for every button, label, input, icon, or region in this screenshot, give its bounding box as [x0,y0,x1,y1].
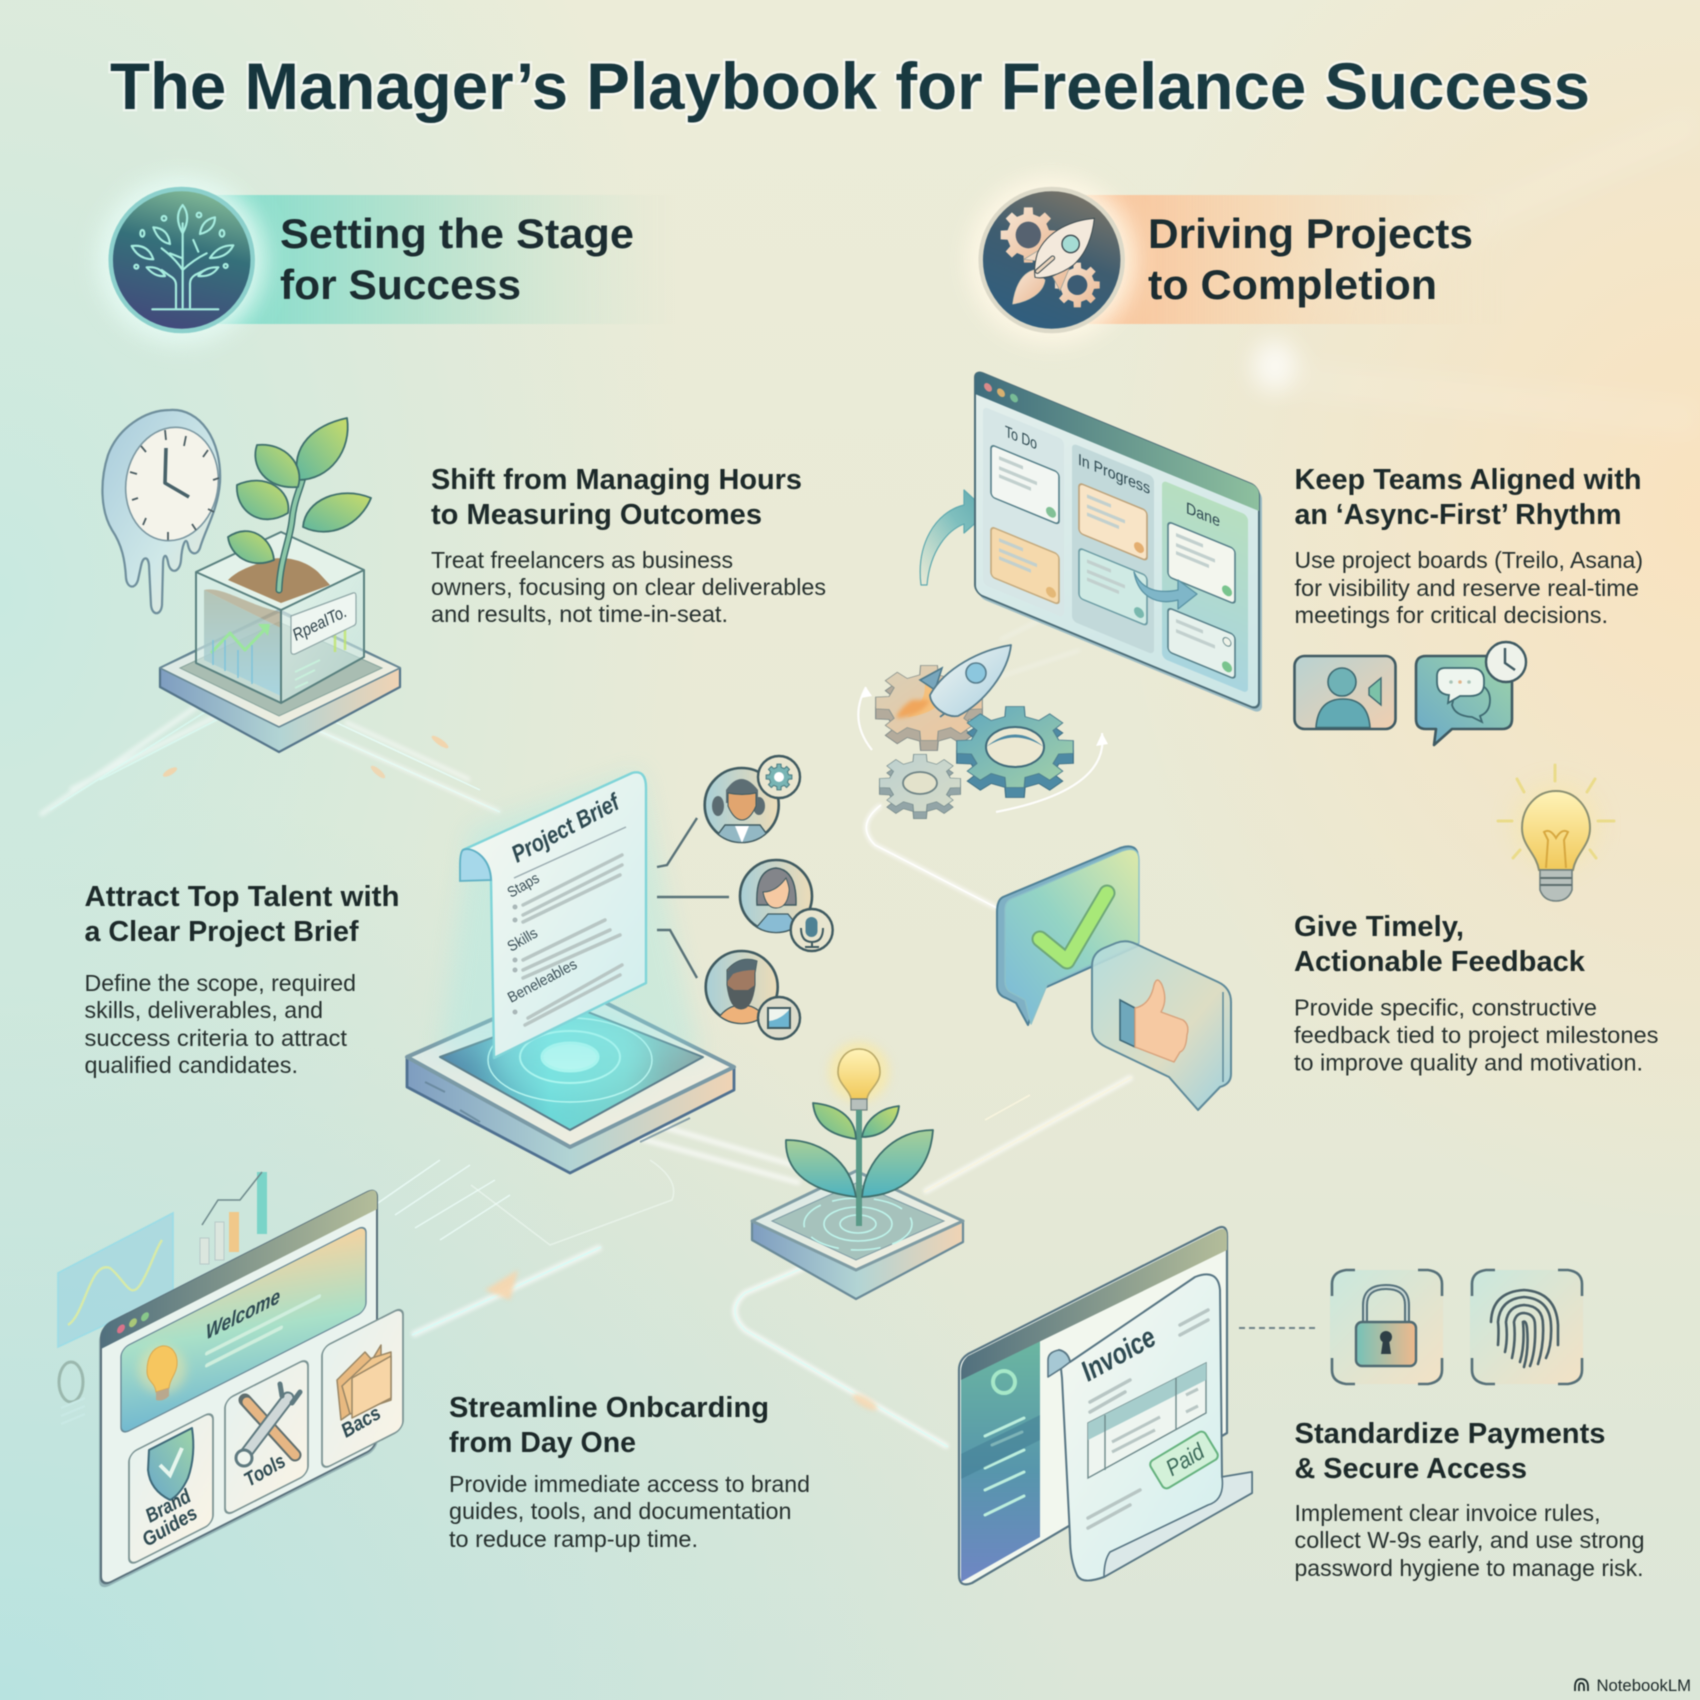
brief section labels: Beneleables [505,956,580,1007]
heading: a Clear Project Brief [84,916,359,948]
column labels: To Do [1005,422,1037,453]
icon: wrench and screwdriver [236,1384,300,1466]
connector lines [657,818,729,978]
icon: fingerprint tile [1470,1270,1583,1384]
body text: Provide specific, constructive [1294,994,1597,1020]
icon: rocket and gears badge [968,176,1136,344]
heading: & Secure Access [1294,1453,1527,1485]
section heading left: Setting the Stage [280,210,634,257]
heading [84,881,400,948]
text block: Keep Teams Aligned [1294,464,1643,628]
heading: Give Timely, [1294,911,1464,943]
illustration: invoice window [959,1227,1252,1584]
body text: for visibility and reserve real-time [1294,575,1639,601]
body text: Implement clear invoice rules, [1294,1500,1600,1526]
heading: Attract Top Talent with [84,881,400,913]
column labels: Dane [1186,499,1220,531]
tile: brand guides [129,1411,213,1566]
body text: owners, focusing on clear deliverables [431,574,826,600]
section heading right: to Completion [1148,261,1437,308]
illustration: project brief on glowing platform [407,756,833,1173]
illustration: onboarding window [58,1172,403,1591]
avatar: freelancer with chart badge [706,951,800,1039]
gear: grey [879,754,961,819]
body text: to reduce ramp-up time. [449,1526,698,1552]
icon: padlock tile [1330,1270,1443,1384]
heading: Shift from Managing Hours [431,464,802,496]
section heading right: Driving Projects [1148,210,1473,257]
illustration: kanban board [920,370,1262,714]
banner right [1085,195,1505,324]
gear: blue [957,706,1073,798]
icon: shield [148,1428,193,1500]
banner left [215,195,675,324]
heading: Streamline Onbcarding [449,1392,769,1424]
section heading right [1148,210,1473,308]
heading: Standardize Payments [1294,1418,1606,1450]
section heading left [280,210,634,308]
invoice table [1088,1363,1206,1478]
NotebookLM watermark: NotebookLM [1596,1677,1691,1695]
body text: Provide immediate access to brand [449,1471,810,1497]
avatar: freelancer with gear badge [705,756,800,845]
platform [160,610,400,752]
text block: Standardize Payments [1294,1418,1644,1581]
icon: video call tile [1294,656,1396,729]
body text [84,970,356,1078]
invoice paper [1048,1274,1252,1581]
glow beam [440,770,700,1057]
illustration: sprout with bulb on platform [752,1042,963,1299]
tile labels: Bacs [338,1402,385,1442]
section header: Driving Projects to Completion [968,176,1505,344]
brief section labels [504,870,580,1007]
body text: skills, deliverables, and [84,997,323,1023]
brief title: Project Brief [507,788,625,868]
avatar: freelancer with mic badge [740,860,833,951]
icon: folder [337,1345,391,1420]
app window [959,1227,1227,1584]
body text: and results, not time-in-seat. [431,601,728,627]
text block: Attract Top Talent [84,881,400,1078]
heading [1294,1418,1606,1485]
tile: docs [322,1307,403,1470]
bars chart [200,1172,267,1264]
brief document [460,772,646,1058]
heading: from Day One [449,1427,636,1459]
chart panel [58,1213,173,1347]
bubble with check mark [997,846,1139,1025]
heading [1294,464,1642,531]
body text: to improve quality and motivation. [1294,1050,1643,1076]
glass box with soil [196,532,364,703]
paid stamp: Paid [1161,1438,1210,1481]
illustration: melting clock and growing plant [102,410,400,752]
body text [1294,1500,1644,1581]
plant stem and leaves [786,1103,933,1226]
decorative ring [59,1362,85,1424]
welcome panel: Welcome [206,1283,280,1344]
tile labels: Tools [240,1450,290,1491]
brief section labels: Skills [504,925,541,955]
tile: tools [225,1358,308,1516]
body text [449,1471,810,1552]
dashed connector [1239,1327,1318,1329]
rocket [896,645,1011,718]
body text: guides, tools, and documentation [449,1498,792,1524]
illustration: rocket and gears [858,645,1108,819]
body text: meetings for critical decisions. [1294,602,1608,628]
icon: plant [228,418,371,590]
heading: to Measuring Outcomes [431,499,762,531]
column labels: In Progress [1078,450,1150,498]
body text: Use project boards (Treilo, Asana) [1294,547,1643,573]
illustration: feedback bubbles [997,846,1231,1110]
heading [431,464,802,531]
heading: an ‘Async-First’ Rhythm [1294,499,1622,531]
heading [1294,911,1585,978]
platform [752,1171,963,1299]
tile labels [138,1402,385,1551]
icon: tree badge [98,176,266,344]
glass box label: RpeaITo. [289,602,350,645]
browser window [99,1174,403,1591]
title: The Manager’s Playbook for Freelance Success [110,49,1590,123]
curved arrow into board [920,490,988,585]
invoice title: Invoice [1076,1321,1161,1388]
body text: success criteria to attract [84,1025,348,1051]
text block: Give Timely Feedback [1294,911,1658,1076]
heading: Actionable Feedback [1294,946,1585,978]
heading [449,1392,769,1459]
bulb [829,1042,889,1110]
body text: password hygiene to manage risk. [1294,1555,1644,1581]
body text: Define the scope, required [84,970,356,996]
icon: async chat tile with clock [1416,642,1526,745]
icon: light bulb [1498,765,1614,901]
column labels [1005,420,1220,531]
background light glows and connection paths [40,120,1700,1447]
section heading left: for Success [280,261,521,308]
text block: Streamline Onboarding [449,1392,810,1552]
heading: Keep Teams Aligned with [1294,464,1642,496]
welcome panel [121,1225,366,1435]
body text: collect W-9s early, and use strong [1294,1527,1644,1553]
body text [1294,994,1658,1076]
gear: tan [876,665,982,751]
body text: qualified candidates. [84,1052,298,1078]
bubble with thumbs up [1092,941,1231,1110]
section header: Setting the Stage for Success [98,176,675,344]
paid stamp [1148,1430,1220,1490]
brief section labels: Staps [504,870,542,901]
arrow between columns [1134,572,1197,609]
board window [975,370,1262,714]
platform [407,985,734,1173]
cards [991,445,1235,679]
text block: Shift from Managing Hours [431,464,826,627]
tile labels: Guides [138,1502,201,1551]
body text: feedback tied to project milestones [1294,1022,1658,1048]
tile labels: Brand [142,1485,195,1527]
icon: melting clock [102,410,227,613]
body text: Treat freelancers as business [431,547,733,573]
icon: welcome bulb [138,1346,186,1400]
body text [1294,547,1643,628]
body text [431,547,826,627]
